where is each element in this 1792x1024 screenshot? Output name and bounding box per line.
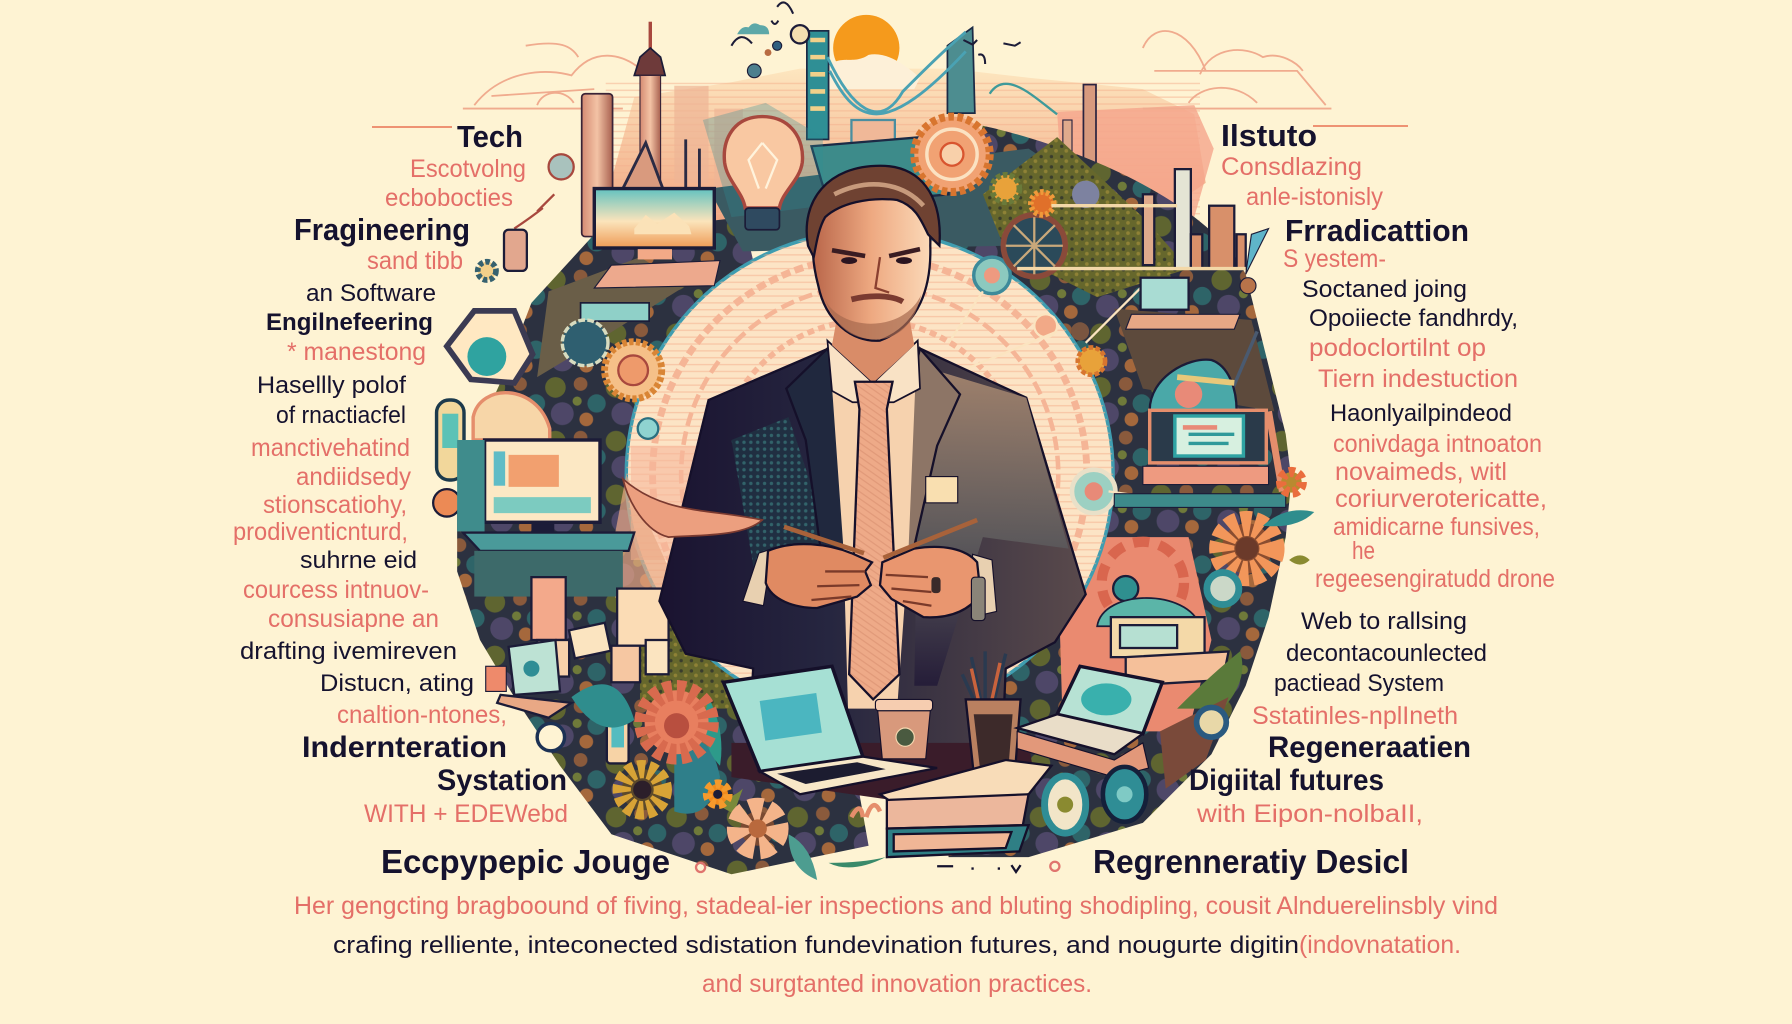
tie [849,382,899,699]
salmon gear field [1057,537,1211,731]
right text column: amidicarne funsives, [1333,513,1540,541]
collar [827,341,920,402]
right laptop [1017,666,1162,777]
right top cylinders [1143,169,1246,269]
right text column: Opoiiecte fandhrdy, [1309,305,1518,332]
badge [926,477,958,503]
rust patch right [1114,309,1274,411]
right text column: pactiead System [1274,670,1444,697]
left connector line [372,126,452,128]
gear: top sun gear [914,117,990,192]
badge pin [514,154,574,229]
right cuff [971,554,997,617]
flower: right small [1281,472,1302,493]
left text column: Hasellly polof [257,372,406,399]
left text column: courcess intnuov- [243,576,429,604]
right text column: coriurverotericatte, [1335,485,1547,513]
left text column: drafting ivemireven [240,638,457,665]
left text column: Indernteration [302,731,507,764]
right text column: novaimeds, witl [1335,458,1507,486]
man [659,166,1086,749]
pill screen [437,400,464,480]
right shoulder light [914,366,1069,686]
left hand [766,544,872,608]
right text column: podoclortilnt op [1309,334,1486,362]
left text column: consusiapne an [268,605,439,633]
ring [537,723,565,751]
phone icon [607,709,629,763]
moss field bottom left [640,594,749,709]
bottom paragraph: crafing relliente, inteconected sdistation fundevination futures, and nougurte digitin [333,932,1299,959]
lenses [638,257,1189,513]
right lapel [897,349,960,571]
olive patch left [537,257,686,377]
flower: bottom sunflower [741,811,775,846]
right text column: Frradicattion [1285,213,1469,248]
stubble [825,295,921,339]
jacket [659,349,1086,749]
central illustration [433,2,1331,880]
bird [623,479,762,537]
right text column: with Eipon-nolbaII, [1196,800,1423,828]
orange dial [433,489,461,517]
disc icons [1045,767,1146,833]
dome [1097,598,1200,626]
pen cup [962,651,1021,774]
left text column [233,119,568,828]
clouds left [463,43,640,109]
left text column: andiidsedy [296,463,411,491]
right foliage [1160,651,1242,789]
bridge [807,31,829,139]
right text column: Ilstuto [1221,118,1317,153]
foliage left [571,684,886,880]
cylinder left [504,230,527,271]
brows and eyes [832,249,920,256]
bottom paragraph: Her gengcting bragboound of fiving, stadeal-ier inspections and bluting shodipling, cousit Alnduerelinsbly vind [294,892,1498,920]
left text column: suhrne eid [300,547,417,574]
right text column: regeesengiratudd drone [1315,565,1555,593]
bottom paragraph: and surgtanted innovation practices. [702,970,1092,998]
clouds right [1143,31,1331,109]
right connector line [1313,125,1408,127]
flower: big right sunflower [1222,510,1314,574]
right text column: Haonlyailpindeod [1330,400,1512,427]
right text column: anle-istonisly [1246,183,1383,211]
sun [833,15,899,81]
right text column: conivdaga intnoaton [1333,430,1542,458]
wheel right [992,175,1099,277]
paper stack left [531,577,669,682]
left text column: of rnactiacfel [276,402,406,429]
left text column: manctivehatind [251,434,410,462]
left monitor [457,440,634,597]
decorative dots near bottom [696,862,1059,872]
right text column: S yestem- [1283,245,1386,273]
left text column: cnaltion-ntones, [337,701,507,729]
heading: bottom left: Eccpypepic Jouge [381,843,670,880]
tablet top book [880,760,1051,817]
left text column: Distucn, ating [320,670,474,697]
left text column: WITH + EDEWebd [364,800,568,828]
right text column: Regeneraatien [1268,731,1471,764]
left towers [582,22,1096,237]
collage mass: right [914,126,1291,857]
left text column: Systation [437,764,567,797]
flower: small orange [707,784,728,805]
left laptop [723,666,937,794]
right text column [1189,118,1555,828]
top monitor [594,189,720,288]
right text column: Consdlazing [1221,153,1362,181]
bottom paragraph: (indovnatation. [1299,931,1461,959]
left text column: Tech [457,119,523,154]
small gear icon [478,262,496,280]
left text column: Escotvolng [410,155,526,183]
bottom paragraph [294,892,1498,998]
flower: orange [645,690,709,754]
watch [971,577,985,621]
right text column: decontacounlected [1286,640,1487,667]
right laptop on shelf [1114,410,1286,507]
right text column: Web to rallsing [1301,608,1467,635]
right text column: he [1352,537,1375,565]
concentric badge right [1197,707,1226,737]
lower right screens [1111,617,1229,686]
small tablet left [486,640,571,718]
shelf and small laptop [1017,206,1269,411]
globe [1150,360,1237,410]
left text column: * manestong [287,338,426,366]
left lapel [786,349,851,583]
moss hill right [983,137,1189,297]
birds and small orbs [731,2,1021,64]
left text column: Fragineering [294,212,470,247]
left text column: stionscatiohy, [263,491,407,519]
nose [875,257,889,293]
left text column: sand tibb [367,247,463,275]
coffee cup [875,699,933,759]
chest halftone [731,417,834,594]
right hand [880,547,981,617]
left text column: Engilnefeering [266,309,433,336]
hair [807,166,940,257]
face [813,174,930,341]
mouth [851,296,903,302]
left cuff [743,549,773,606]
gear: left [605,342,662,399]
right text column: Digiital futures [1189,764,1384,797]
halo dial [606,231,1113,718]
pencils [784,520,977,558]
desk band [731,743,1034,800]
shirt [830,354,917,709]
left text column: prodiventicnturd, [233,518,408,546]
books [887,794,1029,857]
bridge deck [811,135,949,206]
data strip [581,303,649,321]
collage top band [709,149,1097,251]
left text column: ecbobocties [385,184,513,212]
collage mass: left [457,217,869,874]
skyline backdrop [463,2,1331,234]
lightbulb icon [703,103,823,230]
wheel [562,320,608,366]
teal disc [1207,573,1239,605]
right text column: Soctaned joing [1302,276,1467,303]
hex frame with teal blob [447,311,533,383]
flower: yellow sunflower [622,769,663,810]
neck [832,320,914,383]
heading: bottom right: Regrenneratiy Desicl [1093,843,1409,880]
right text column: Sstatinles-nplIneth [1252,702,1458,730]
left text column: an Software [306,280,436,307]
arc panel [473,393,550,440]
right text column: Tiern indestuction [1318,365,1518,393]
